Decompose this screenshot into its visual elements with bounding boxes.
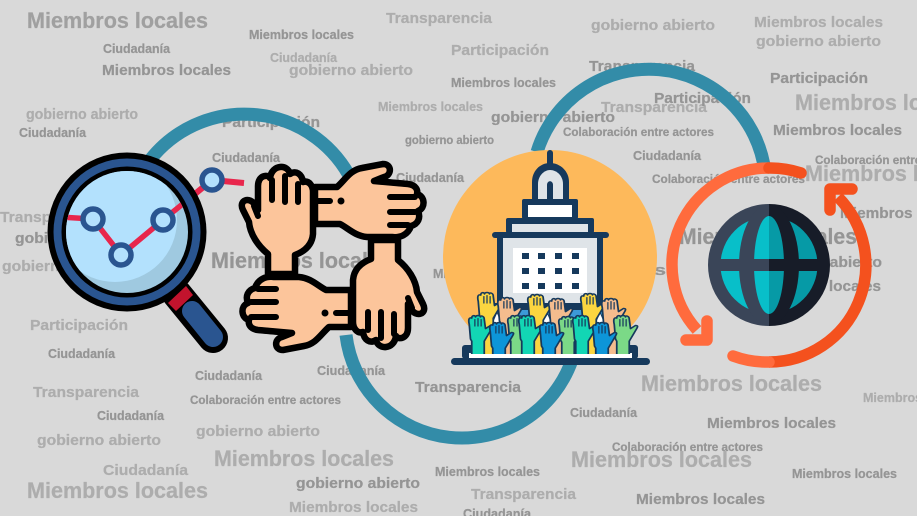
word cloud background: Ciudadanía [19,125,87,140]
word cloud background: Miembros locales [641,371,822,396]
word cloud background: Ciudadanía [195,368,263,383]
arrow: counter-clockwise [672,168,801,340]
icon: magnifying glass with line chart [48,152,244,338]
word cloud background: Colaboración entre actores [652,172,805,186]
word cloud background: Colaboración entre actores [190,393,341,407]
word cloud background: Miembros locales [435,464,540,479]
word cloud background: Participación [30,317,128,334]
word cloud background: Miembros locales [752,278,881,295]
word cloud background: gobierno abierto [491,109,615,126]
word cloud background: Miembros locales [754,14,883,31]
word cloud background: Ciudadanía [396,170,465,185]
word cloud background: Participación [770,70,868,87]
word cloud background: gobierno abierto [289,62,413,79]
word cloud background: Transparencia [415,379,522,396]
word cloud background: Miembros locales [433,266,538,281]
word cloud background: Ciudadanía [633,148,702,163]
word cloud background: gobierno abierto [15,230,139,247]
word cloud background: Ciudadanía [103,462,189,479]
word cloud background: Transparencia [471,486,577,503]
word cloud background: Transparencia [33,384,140,401]
word cloud background: gobierno abierto [405,133,494,147]
word cloud background: Miembros locales [792,466,897,481]
raised hands [468,292,638,354]
word cloud background: Participación [451,42,549,59]
word cloud background: Ciudadanía [317,363,386,378]
arrow: clockwise [733,189,866,362]
word cloud background: Miembros locales [773,122,902,139]
word cloud background: Colaboración entre actores [612,440,763,454]
word cloud background: Transparencia [0,209,107,226]
word cloud background: Transparencia [601,99,708,116]
word cloud background: Ciudadanía [48,346,116,361]
word cloud background: Ciudadanía [97,408,165,423]
word cloud background: Miembros locales [679,224,857,249]
icon: globe with circular arrows [672,168,866,362]
word cloud background: Transparencia [386,10,493,27]
word cloud background: Colaboración entre actores [563,125,714,139]
word cloud background: Miembros locales [27,478,208,503]
word cloud background: Miembros locales [289,499,418,516]
base [451,345,650,365]
word cloud background: gobierno abierto [758,254,882,271]
word cloud background: gobierno abierto [591,17,715,34]
word cloud background: Transparencia [589,58,696,75]
word cloud background: Miembros locales [211,248,392,273]
word cloud background: Miembros locales [378,99,483,114]
word cloud background: Miembros locales [102,62,231,79]
word cloud background: Ciudadanía [570,405,638,420]
globe [708,204,830,326]
word cloud background: Miembros locales [707,415,836,432]
connecting teal wave [150,69,765,438]
word cloud background: Ciudadanía [212,150,281,165]
word cloud background: Miembros locales [451,75,556,90]
word cloud background: gobierno abierto [756,33,881,50]
word cloud background: gobierno abierto [196,423,320,440]
word cloud background: Miembros locales [249,27,354,42]
word cloud background: Ciudadanía [103,41,171,56]
word cloud background: gobierno abierto [2,258,126,275]
word cloud background: Miembros locales [571,447,752,472]
word cloud background: Miembros locales [214,446,394,471]
word cloud background: Miembros locales [27,8,208,33]
icon: four interlocked hands [242,164,424,350]
word cloud background: gobierno abierto [296,475,420,492]
word cloud background: Participación [654,90,751,107]
word cloud background: Miembros locales [485,262,666,279]
icon: government building with raised hands [443,150,657,365]
word cloud background: Participación [222,114,320,131]
word cloud background: gobierno abierto [37,432,161,449]
word cloud background: Ciudadanía [270,50,338,65]
word cloud background: gobierno abierto [26,106,138,123]
word cloud background: Miembros locales [636,491,765,508]
